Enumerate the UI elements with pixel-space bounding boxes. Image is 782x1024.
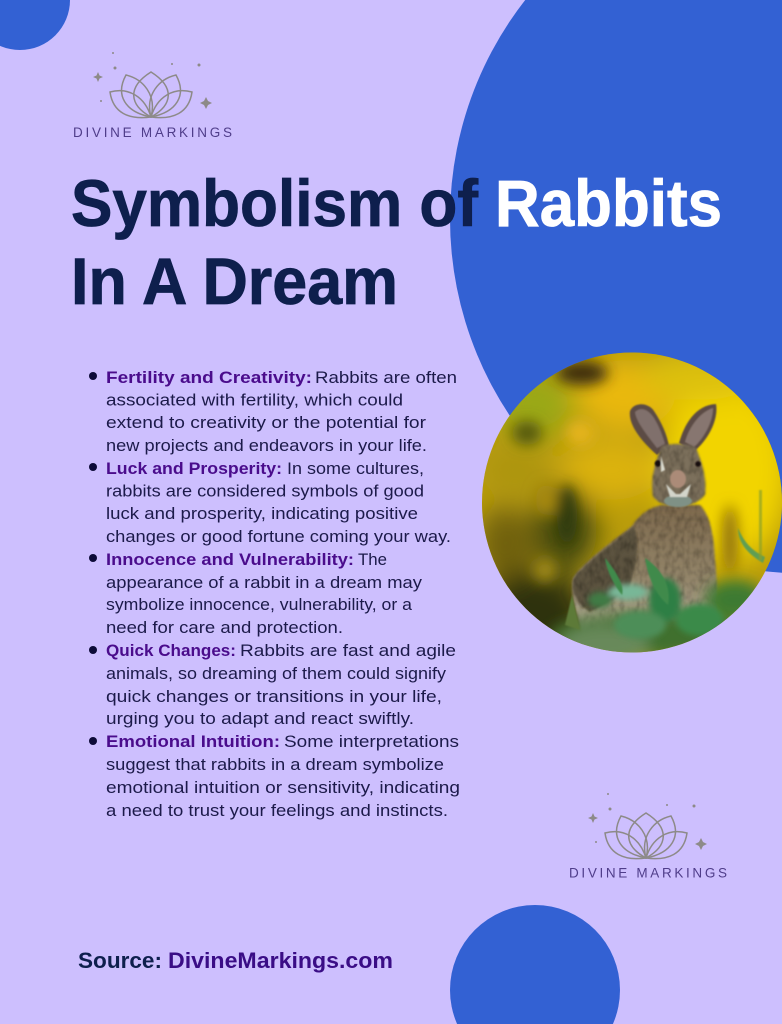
source label: Source: <box>78 948 162 973</box>
bullet: emotional intuition: a need to trust your feelings and instincts. <box>106 801 448 820</box>
rabbit muzzle <box>655 456 701 507</box>
grass <box>550 490 765 665</box>
bottom blue circle <box>450 905 620 1024</box>
photo background bokeh <box>477 350 782 660</box>
bullet: luck: rabbits are considered symbols of good <box>106 482 424 500</box>
title <box>71 166 722 318</box>
bullet: quick changes: Rabbits are fast and agile <box>240 641 456 660</box>
bullet: fertility: associated with fertility, which could <box>106 390 403 410</box>
bullet: quick changes: animals, so dreaming of them could signify <box>106 664 447 683</box>
bullet: emotional intuition: suggest that rabbits in a dream symbolize <box>106 755 444 774</box>
bullet: fertility <box>89 368 457 455</box>
bullet: emotional intuition: emotional intuition or sensitivity, indicating <box>106 778 460 797</box>
bullet: emotional intuition <box>89 732 460 820</box>
bullet: fertility: new projects and endeavors in your life. <box>106 436 427 455</box>
logo: top <box>73 52 232 140</box>
source site: DivineMarkings.com <box>168 948 393 973</box>
bullet: innocence: Innocence and Vulnerability: <box>106 550 354 569</box>
bullet: luck: In some cultures, <box>287 459 424 478</box>
icon: sparkles <box>93 52 212 109</box>
logo wordmark: DIVINE MARKINGS <box>569 866 727 880</box>
bullet: innocence: appearance of a rabbit in a dream may <box>106 573 423 592</box>
rabbit head <box>652 444 705 506</box>
bullet: luck: Luck and Prosperity: <box>106 459 282 478</box>
rabbit body <box>572 505 717 640</box>
bullet: emotional intuition: Some interpretations <box>284 732 459 751</box>
bullet: luck <box>89 459 451 546</box>
large blue circle <box>450 0 782 574</box>
title line 1 dark: Symbolism of <box>71 166 479 240</box>
bullet: fertility: Rabbits are often <box>315 368 457 387</box>
bullet: quick changes: Quick Changes: <box>106 641 236 660</box>
bullet: innocence: need for care and protection. <box>106 618 343 637</box>
bullet: innocence: symbolize innocence, vulnerability, or a <box>106 595 413 614</box>
bullet: emotional intuition: Emotional Intuition: <box>106 732 280 751</box>
bullet: luck: changes or good fortune coming your way. <box>106 527 451 546</box>
bullet: quick changes <box>89 641 456 728</box>
icon: lotus <box>110 72 192 118</box>
icon: lotus <box>605 813 687 859</box>
title line 1 white: Rabbits <box>495 166 722 240</box>
rabbit haunch <box>573 526 637 612</box>
bullet: quick changes: urging you to adapt and react swiftly. <box>106 709 414 728</box>
logo wordmark: DIVINE MARKINGS <box>73 125 232 140</box>
title line 2: In A Dream <box>71 244 398 318</box>
bullet: quick changes: quick changes or transitions in your life, <box>106 687 442 706</box>
bullet: innocence: The <box>358 550 387 569</box>
bullet: innocence <box>89 550 423 637</box>
logo: bottom <box>569 793 727 880</box>
bullet: fertility: extend to creativity or the potential for <box>106 413 426 432</box>
bullet list <box>89 368 460 820</box>
source line <box>78 948 393 973</box>
rabbit <box>572 404 717 640</box>
top-left blue circle <box>0 0 70 50</box>
photo: rabbit in a circle <box>477 350 782 665</box>
bullet: luck: luck and prosperity, indicating positive <box>106 504 418 523</box>
bullet: fertility: Fertility and Creativity: <box>106 368 312 387</box>
rabbit ears <box>630 404 716 455</box>
icon: sparkles <box>588 793 707 850</box>
